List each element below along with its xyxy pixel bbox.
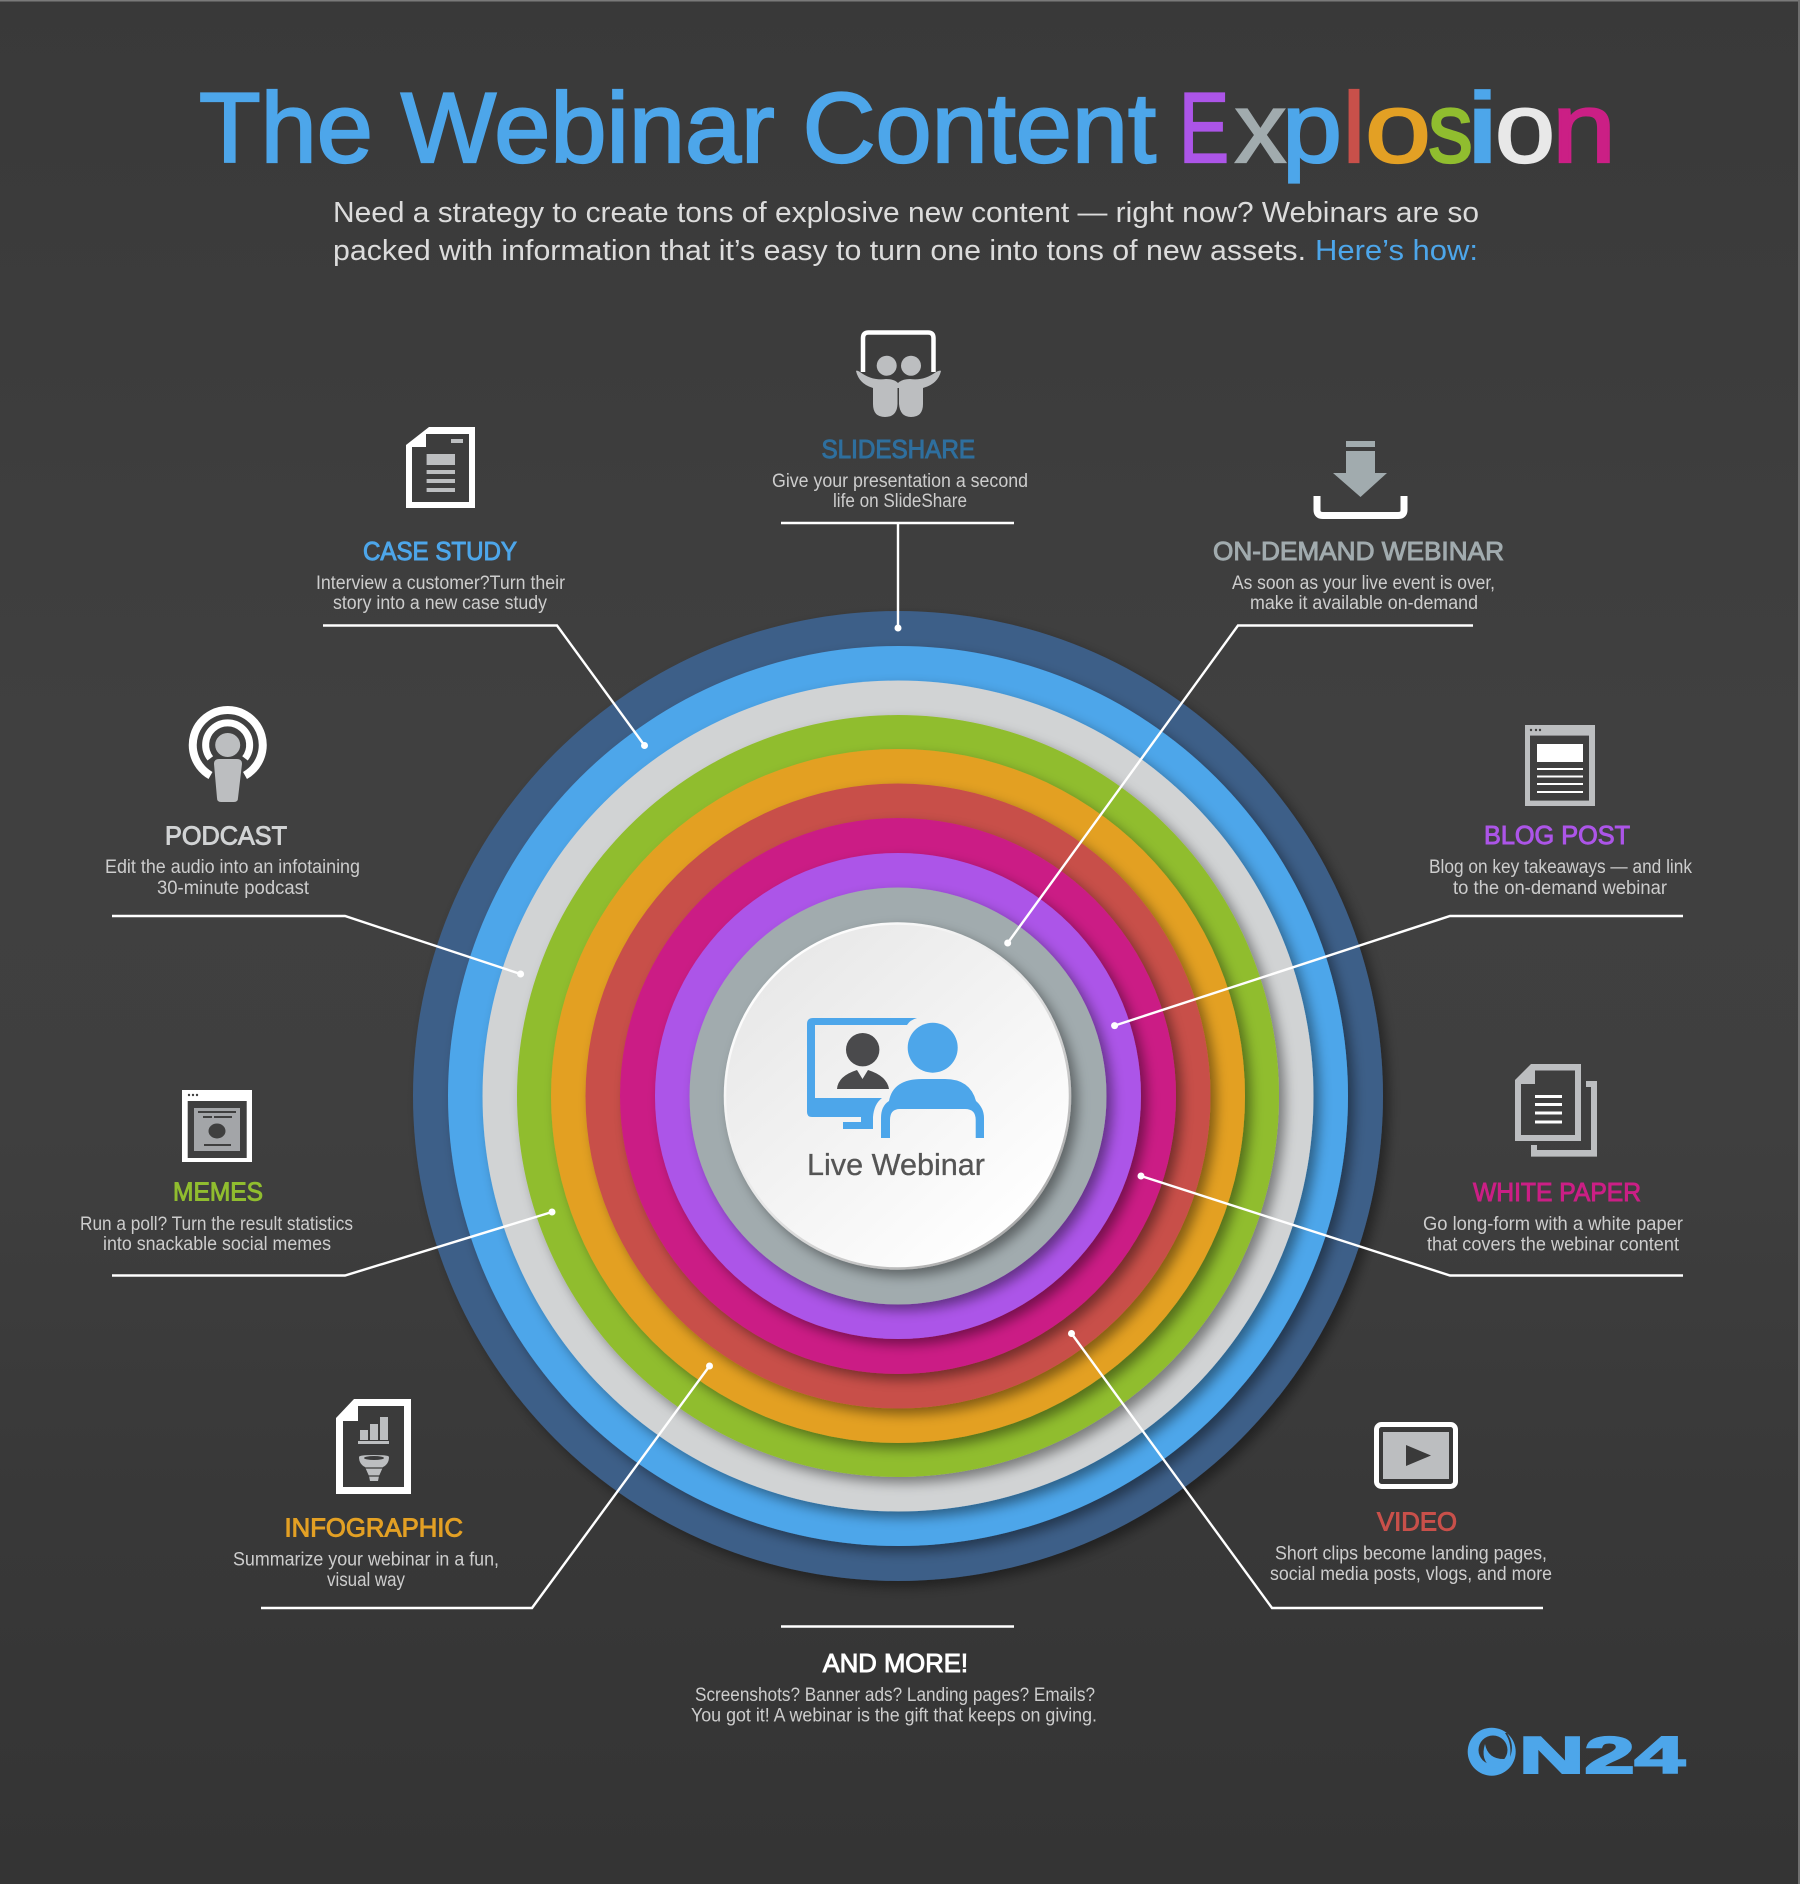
icon: slideshare [856, 332, 941, 417]
icon: podcast [193, 710, 263, 802]
heading: blog post: BLOG POST [1484, 820, 1630, 850]
description: white paper [1423, 1214, 1684, 1256]
title: x [1235, 72, 1286, 183]
callout: video [1270, 1424, 1552, 1585]
description: case study: story into a new case study [333, 593, 547, 614]
subtitle [333, 197, 1479, 267]
description: white paper: that covers the webinar content [1427, 1234, 1680, 1256]
description: infographic [233, 1550, 499, 1591]
heading: infographic: INFOGRAPHIC [284, 1512, 463, 1542]
callout: white paper [1423, 1064, 1684, 1256]
description: slideshare: life on SlideShare [833, 491, 967, 512]
description: on-demand webinar: make it available on-demand [1250, 593, 1478, 614]
title [199, 72, 1616, 183]
icon: memes [182, 1090, 252, 1162]
icon: live webinar [807, 1018, 984, 1138]
description: podcast: 30-minute podcast [157, 878, 310, 899]
subtitle: packed with information that it’s easy to turn one into tons of new assets. [333, 235, 1306, 267]
icon: infographic [336, 1399, 411, 1494]
description: infographic: Summarize your webinar in a fun, [233, 1550, 499, 1570]
description: on-demand webinar [1232, 573, 1495, 614]
title: E [1179, 72, 1229, 183]
title: p [1282, 72, 1342, 183]
title: i [1466, 72, 1499, 183]
description: slideshare [772, 471, 1028, 512]
description: blog post: Blog on key takeaways — and link [1429, 857, 1692, 878]
logo: ON24: N24 [1519, 1727, 1685, 1785]
heading: podcast: PODCAST [165, 820, 287, 850]
logo: ON24 [1468, 1727, 1685, 1785]
title: s [1428, 72, 1473, 183]
subtitle: Here’s how: [1315, 235, 1478, 267]
description: case study: Interview a customer?Turn their [316, 573, 566, 594]
title: o [1495, 72, 1555, 183]
concentric rings [413, 611, 1383, 1581]
description: video: Short clips become landing pages, [1275, 1544, 1547, 1564]
heading: video: VIDEO [1377, 1506, 1457, 1536]
connector lines [112, 523, 1683, 1626]
description: memes: Run a poll? Turn the result statistics [80, 1214, 353, 1235]
heading: and more: AND MORE! [823, 1648, 968, 1678]
description: on-demand webinar: As soon as your live event is over, [1232, 573, 1495, 594]
description: case study [316, 573, 566, 614]
icon: download [1317, 441, 1404, 516]
heading: case study: CASE STUDY [363, 536, 517, 566]
description: and more: Screenshots? Banner ads? Landing pages? Emails? [695, 1685, 1095, 1706]
title: l [1343, 72, 1365, 183]
description: slideshare: Give your presentation a second [772, 471, 1028, 492]
callout: memes [80, 1090, 353, 1255]
description: and more: You got it! A webinar is the gift that keeps on giving. [691, 1706, 1097, 1726]
callout: blog post [1429, 725, 1692, 899]
title: The Webinar Content [199, 72, 1156, 183]
icon: case study [406, 427, 475, 508]
callout: infographic [233, 1399, 499, 1591]
icon: video [1376, 1424, 1456, 1486]
callout: podcast [105, 710, 360, 899]
callout: case study [316, 427, 566, 614]
subtitle: Need a strategy to create tons of explosive new content — right now? Webinars are so [333, 197, 1479, 229]
title: n [1552, 72, 1616, 183]
heading: memes: MEMES [173, 1176, 263, 1206]
description: podcast [105, 857, 360, 899]
heading: on-demand webinar: ON-DEMAND WEBINAR [1213, 536, 1504, 566]
description: white paper: Go long-form with a white paper [1423, 1214, 1684, 1235]
description: blog post: to the on-demand webinar [1453, 878, 1668, 899]
description: infographic: visual way [327, 1570, 405, 1591]
description: blog post [1429, 857, 1692, 899]
icon: blog post [1525, 725, 1595, 806]
center disc: live webinar [725, 924, 1070, 1268]
callout: on-demand webinar [1213, 441, 1504, 614]
description: and more [691, 1685, 1097, 1726]
callout: and more [691, 1648, 1097, 1726]
heading: white paper: WHITE PAPER [1473, 1177, 1641, 1207]
label: live webinar: Live Webinar [807, 1147, 985, 1182]
heading: slideshare: SLIDESHARE [822, 434, 975, 464]
title: o [1365, 72, 1431, 183]
description: memes [80, 1214, 353, 1255]
icon: white paper [1515, 1064, 1597, 1157]
description: video: social media posts, vlogs, and more [1270, 1564, 1552, 1585]
description: memes: into snackable social memes [103, 1234, 331, 1255]
callout: slideshare [772, 332, 1028, 512]
description: video [1270, 1544, 1552, 1585]
description: podcast: Edit the audio into an infotaining [105, 857, 360, 878]
